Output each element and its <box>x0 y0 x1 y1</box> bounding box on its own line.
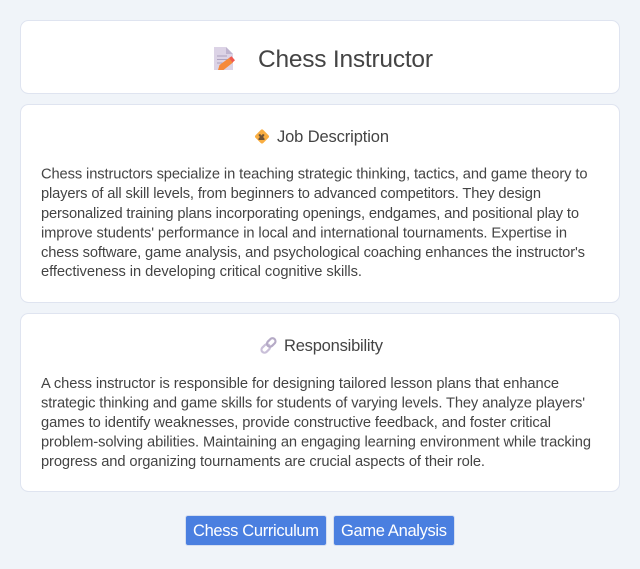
text block: responsibility: strategic thinking and game skills for students of varying levels. They analyze players' <box>41 396 585 412</box>
text block: job description: improve students' performance in local and international tournaments. Expertise in <box>41 226 567 242</box>
tag: game analysis <box>334 516 454 546</box>
panel: responsibility <box>20 314 620 492</box>
text block: job description: Chess instructors specialize in teaching strategic thinking, tactics, and game theory to <box>41 166 588 182</box>
text block: responsibility: problem-solving abilities. Maintaining an engaging learning environment while tracking <box>41 434 591 450</box>
text block: responsibility <box>41 376 591 470</box>
panel: job description <box>20 104 620 302</box>
tag: chess curriculum: Chess Curriculum <box>193 522 319 540</box>
text block: job description: chess software, game analysis, and psychological coaching enhances the instructor's <box>41 245 585 261</box>
icon: document with pencil <box>214 47 235 70</box>
tag: game analysis: Game Analysis <box>341 522 447 540</box>
heading: responsibility: Responsibility <box>284 337 384 355</box>
icon: orange diamond with chess glyph <box>254 129 270 144</box>
text block: job description: effectiveness in developing critical cognitive skills. <box>41 264 362 280</box>
heading: job description: Job Description <box>277 128 389 146</box>
text block: job description <box>41 166 588 280</box>
title: Chess Instructor <box>258 46 433 73</box>
text block: responsibility: A chess instructor is responsible for designing tailored lesson plans that enhance <box>41 376 559 392</box>
text block: responsibility: progress and organizing tournaments are crucial aspects of their role. <box>41 454 485 470</box>
text block: job description: players of all skill levels, from beginners to advanced competitors. They design <box>41 186 541 202</box>
tag: chess curriculum <box>186 516 326 546</box>
icon: chain link <box>260 337 277 354</box>
text block: job description: personalized training plans incorporating openings, endgames, and positional play to <box>41 206 579 222</box>
text block: responsibility: games to identify weaknesses, provide constructive feedback, and foster critical <box>41 415 551 431</box>
panel: title card <box>20 20 620 94</box>
